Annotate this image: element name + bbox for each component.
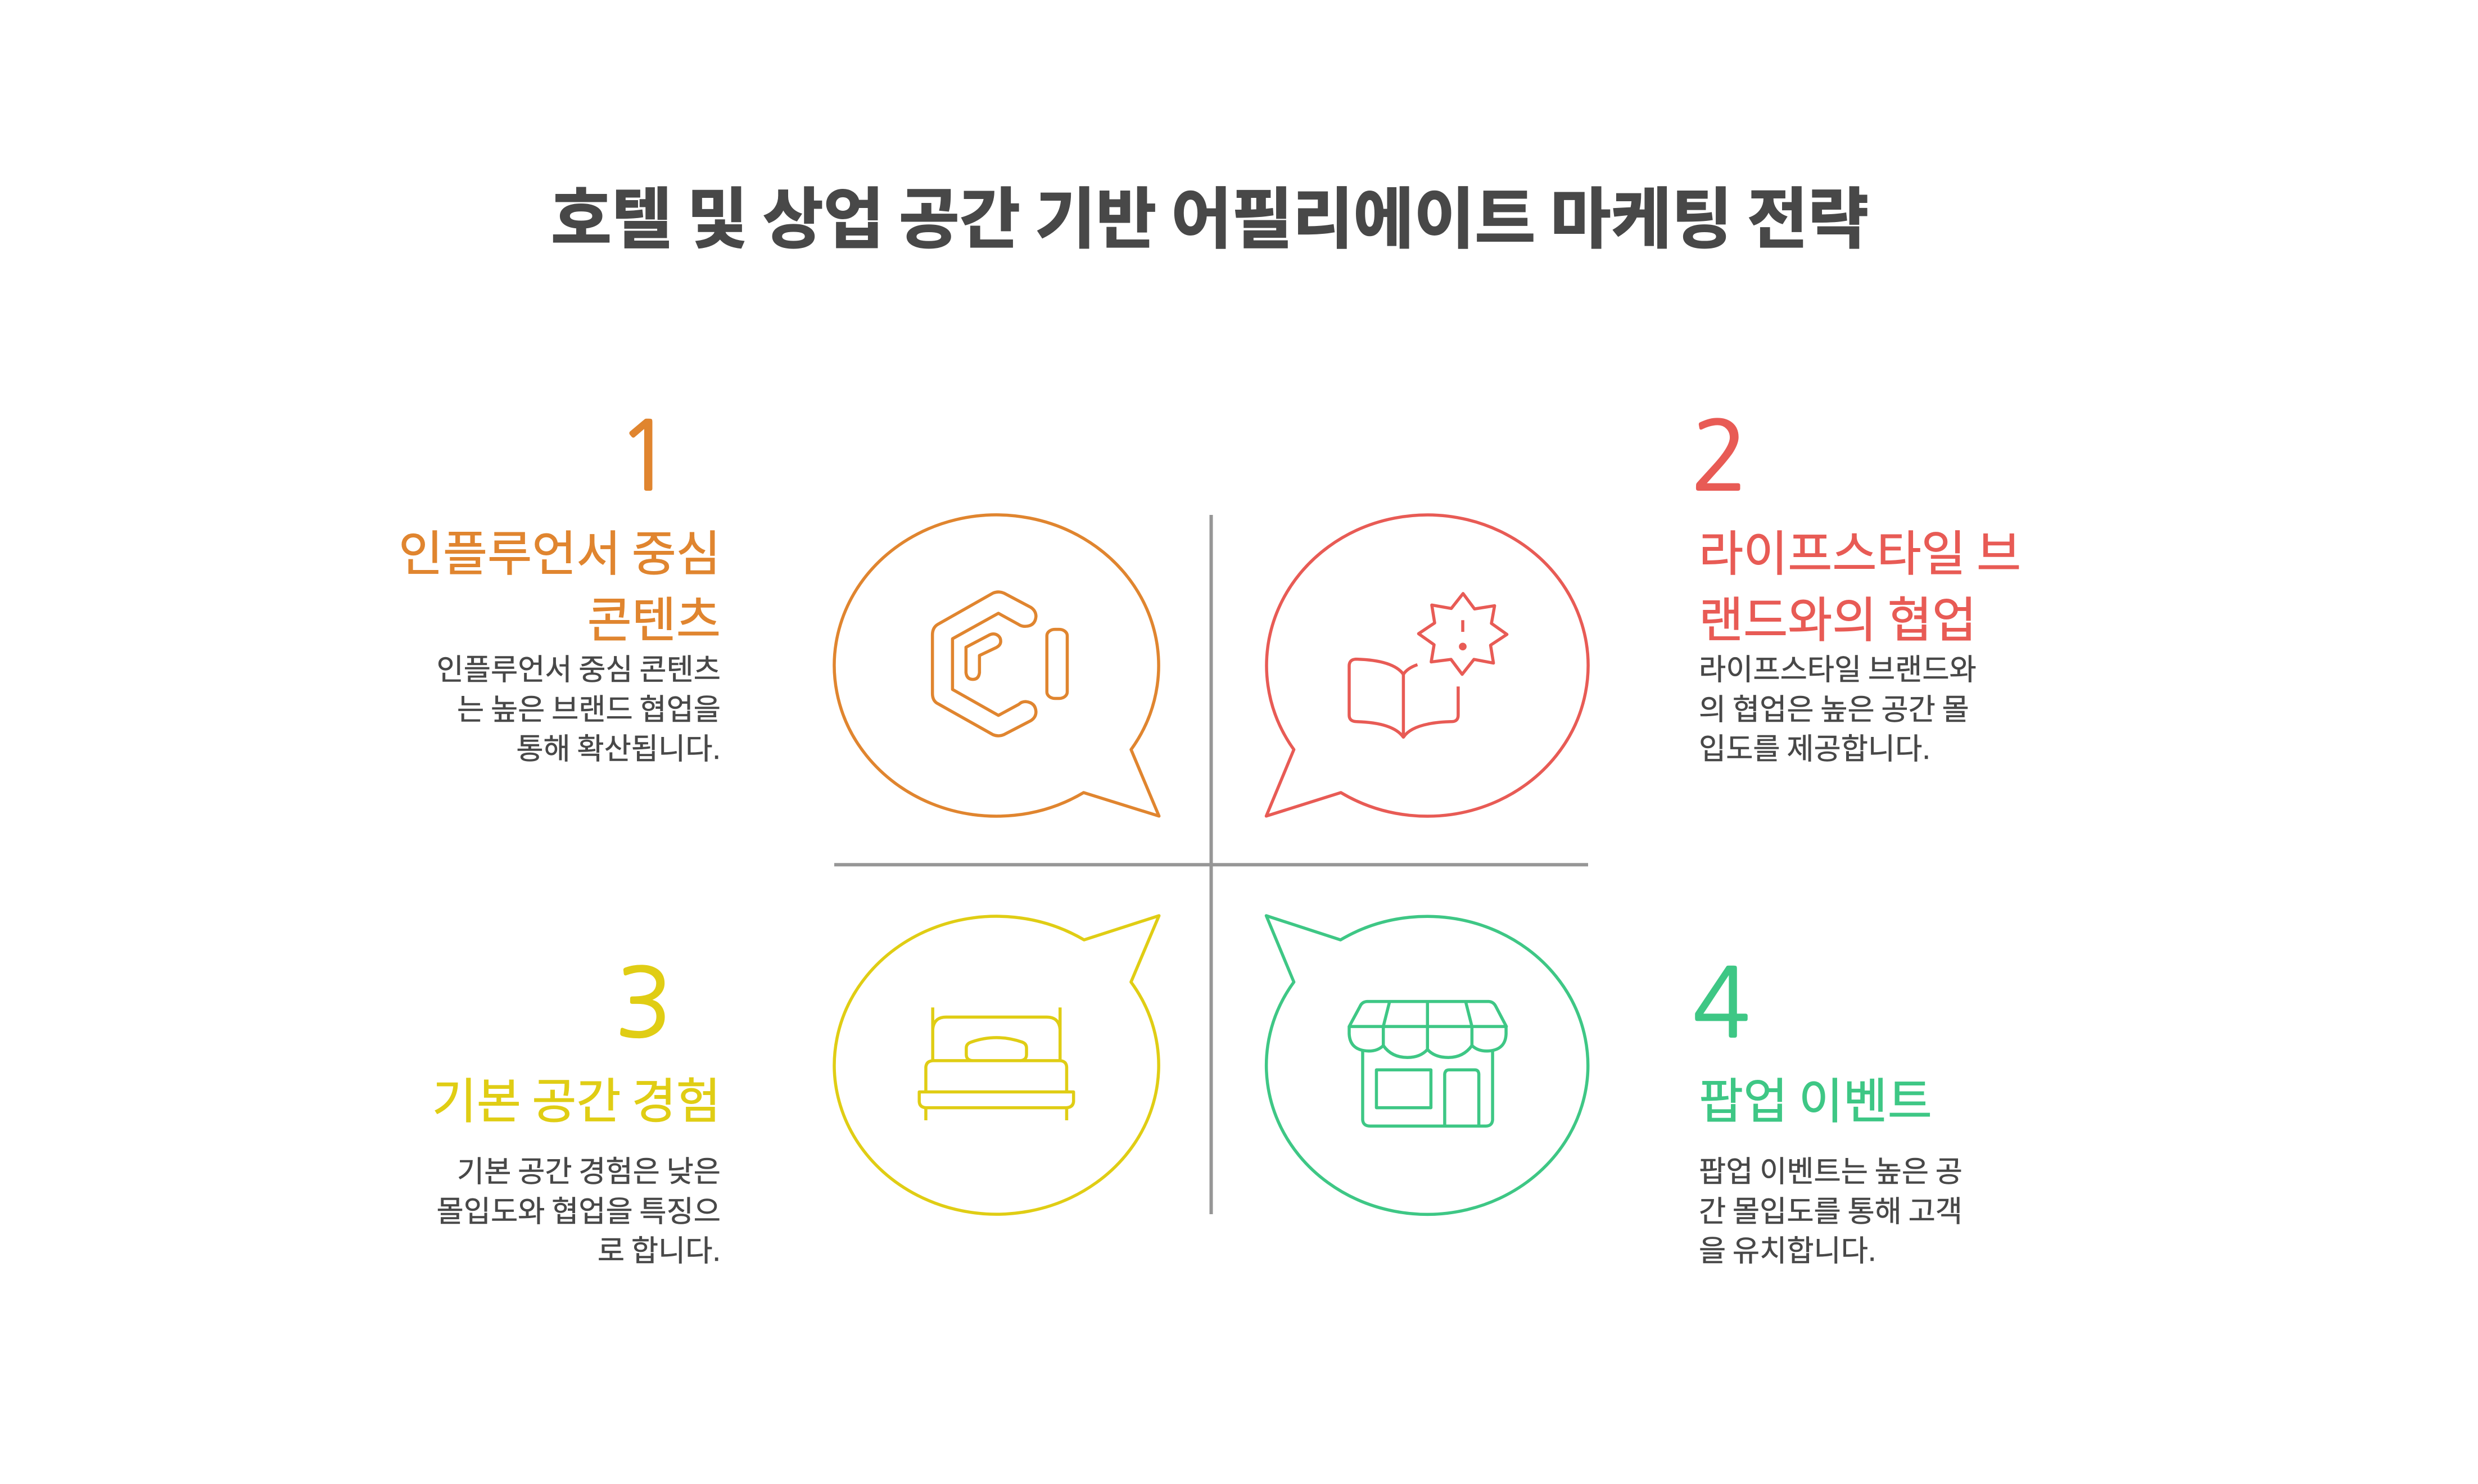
step 4 description: 을 유치합니다. [1699,1235,1876,1268]
step 1 description: 인플루언서 중심 콘텐츠 [437,654,721,686]
title: 호텔 및 상업 공간 기반 어필리에이트 마케팅 전략 [551,183,1869,256]
speech bubble 3 [834,916,1159,1214]
step 2 number: 2 [1691,409,1748,504]
speech bubble 1 [834,515,1159,816]
panel: step 2 lifestyle brand collaboration [1266,409,2021,816]
step 1 description: 통해 확산됩니다. [516,733,721,766]
step 1 number: 1 [617,409,674,504]
step 3 heading: 기본 공간 경험 [432,1075,721,1129]
step 3 description: 기본 공간 경험은 낮은 [457,1156,721,1188]
panel: step 1 influencer content [399,409,1159,816]
quadrant divider lines [834,515,1588,1214]
icon: hexagon C shape [933,592,1067,736]
step 2 heading: 라이프스타일 브 [1699,527,2021,581]
step 3 description: 몰입도와 협업을 특징으 [437,1196,721,1228]
step 2 description: 입도를 제공합니다. [1699,733,1930,766]
step 2 heading: 랜드와의 협업 [1699,594,1977,648]
icon: open book with alert badge [1349,594,1507,737]
step 4 description: 간 몰입도를 통해 고객 [1699,1196,1962,1228]
step 1 description: 는 높은 브랜드 협업을 [457,694,721,726]
step 2 description: 의 협업은 높은 공간 몰 [1699,694,1969,726]
step 2 description: 라이프스타일 브랜드와 [1699,654,1977,686]
panel: step 3 basic space experience [432,916,1159,1268]
panel: step 4 pop-up event [1266,916,1962,1268]
icon: bed [919,1007,1074,1120]
step 1 heading: 콘텐츠 [587,594,721,648]
speech bubble 4 [1266,916,1588,1214]
step 1 heading: 인플루언서 중심 [399,527,721,581]
step 3 number: 3 [615,956,672,1051]
speech bubble 2 [1266,515,1588,816]
step 4 heading: 팝업 이벤트 [1699,1075,1932,1129]
step 3 description: 로 합니다. [598,1235,721,1268]
icon: storefront [1349,1002,1507,1126]
step 4 description: 팝업 이벤트는 높은 공 [1699,1156,1962,1188]
step 4 number: 4 [1693,956,1750,1051]
